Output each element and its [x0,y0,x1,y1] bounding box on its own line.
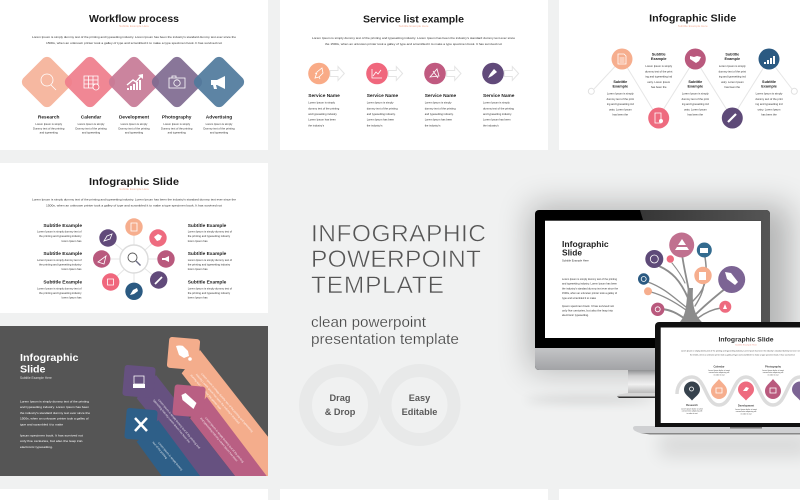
monitor body text: the industry's standard dummy text ever since the [562,286,618,290]
ribbon: peach: dummy text ever since the printer took [190,373,223,411]
main title: POWERPOINT [311,246,481,273]
label: advertising: and typesetting [210,131,229,135]
node right [157,250,175,268]
label: photography: and typesetting [168,131,186,135]
text: lower block 1 [607,80,634,117]
badge: drag and drop [306,370,374,440]
text: top block 2: Example [724,57,740,61]
panel: zigzag infographic [559,0,800,150]
heading: workflow process: Workflow process [89,13,179,25]
laptop intro text: the 1500s, when an unknown printer took a galley of type and scrambled it to make a type specimen book. It has survived not [690,354,795,356]
text: top block 2: dummy text of the print [719,69,746,73]
ribbon: peach: Lorem Ipsum is simply dummy text of the printing and typesetting [200,372,254,433]
label: research: Dummy text of the printing [33,126,65,130]
left text 1: Subtitle Example [43,223,82,229]
heading: infographic slide: Slide [20,364,46,376]
service 3: and typesetting industry. [425,112,454,116]
left text 1: the printing and typesetting industry [39,234,82,238]
label: research: and typesetting [40,131,58,135]
laptop heading: Infographic Slide [718,336,774,344]
monitor body text: 1500s, when an unknown printer took a galley of [562,291,617,295]
pin: photography [765,379,781,399]
body text: only five centuries, but also the leap into [20,439,83,443]
service 2: Lorem Ipsum has been [367,118,395,122]
card: tag [172,384,206,418]
monitor floor shadow [525,397,655,403]
label: advertising: Advertising [206,114,232,120]
label: research: Research [38,114,60,120]
body text: 1500s, when an unknown printer took a galley of [20,416,89,420]
intro text: Lorem Ipsum is simply dummy text of the printing and typesetting industry. Lorem Ipsum has been the industry's standard dummy text ever since the [32,198,237,202]
intro text [312,36,516,46]
right text 1: Lorem Ipsum is simply dummy text of [188,230,232,234]
badge: easy editable [385,370,454,440]
heading: infographic slide [20,353,79,376]
service 4: dummy text of the printing [483,106,514,110]
laptop intro text: Lorem Ipsum is simply dummy text of the printing and typesetting industry. Lorem Ipsum has been the industry's standard dummy text ever since [681,350,800,352]
label: photography: consectetur adipiscing elit [763,371,784,374]
right text 2: lorem Ipsum has [188,267,208,271]
left text 3: Subtitle Example [43,280,82,286]
ribbon: mauve: and typesetting industry Lorem Ipsum has been [199,416,239,463]
badge: easy editable: Easy [409,393,431,403]
subheading [311,314,459,348]
service 3: Lorem Ipsum has been [425,118,453,122]
right text 1: Subtitle Example [188,223,227,229]
label: photography: Lorem Ipsum dolor sit amet [762,369,784,372]
node lower right [150,271,167,289]
label: research: Research [686,403,698,407]
label: development: Development [119,114,149,120]
left text 2: the printing and typesetting industry [39,262,82,266]
monitor subtitle: Subtitle Example Here [562,258,589,262]
end node right [791,88,797,94]
text: top block 2: ing and typesetting ind [719,75,746,79]
tree chart [638,232,745,323]
card: rocket [167,337,200,370]
service 4: Lorem Ipsum has been [483,118,511,122]
monitor body text: only five centuries, but also the leap into [562,308,614,312]
node upper left [99,229,117,247]
service 3 [424,63,461,128]
pin: calendar [711,379,727,399]
ribbon: peach: industry Lorem Ipsum has been the industry's standard [195,373,241,425]
wave line [677,377,800,405]
label: calendar [75,114,107,135]
subtitle: Subtitle Example Here [399,24,429,28]
label: advertising: Dummy text of the printing [203,126,235,130]
pin: development [738,382,754,400]
body text: electronic typesetting. [20,445,53,449]
label: development: Lorem Ipsum dolor sit amet [735,408,757,411]
body text: and typesetting industry. Lorem Ipsum has been [20,405,90,409]
node: pencil [722,108,743,128]
ribbon: purple [137,375,235,476]
badge: drag and drop: Drag [330,393,350,403]
label: photography: Photography [162,114,192,120]
label: research [33,114,65,135]
card: inbox [122,365,156,398]
label: calendar: consectetur adipiscing elit [709,371,730,374]
ribbon: mauve [190,397,267,476]
service 3: Service Name [425,93,457,99]
left text 1 [37,223,82,243]
right text 3: Lorem Ipsum is simply dummy text of [188,286,232,290]
main title: INFOGRAPHIC [311,221,486,248]
label: research: Lorem Ipsum is simply [35,122,63,126]
label: photography [762,364,784,376]
monitor stand [617,370,660,398]
diamond: calendar [62,54,118,110]
label: development: in order to eat [740,412,752,415]
circle pyramid large [669,232,694,258]
left text 1: lorem Ipsum has [62,239,82,243]
right text 1: lorem Ipsum has [188,239,208,243]
body text: the industry's standard dummy text ever since the [20,411,91,415]
label: advertising [203,114,235,135]
circle pink [719,301,731,313]
service 3: the industry's [425,124,441,128]
heading: infographic slide: Infographic Slide [649,12,736,24]
node: chart [758,48,780,70]
service 1: Lorem Ipsum is simply [308,100,336,104]
text: lower block 2: ustry. Lorem Ipsum [684,107,707,111]
service 2 [366,63,403,128]
node: checklist [648,108,669,128]
panel: workflow process [0,0,268,150]
right text 2: Lorem Ipsum is simply dummy text of [188,258,232,262]
body text [20,399,91,449]
label: photography: Photography [765,364,782,368]
diamond: development [106,54,162,110]
ribbon: blue: text of the printing [152,441,169,460]
left text 3: Lorem Ipsum is simply dummy text of [37,286,82,290]
circle rocket [718,266,745,293]
circle pink small [667,255,674,263]
service 4: Lorem Ipsum is simply [483,100,510,104]
label: research: in order to eat [686,412,698,415]
circle peach note [694,267,712,284]
text: top block 2: Subtitle [725,52,739,56]
subtitle: Subtitle Example Here [119,24,149,28]
service 1: dummy text of the printing [308,106,340,110]
main title: TEMPLATE [311,272,444,299]
service 1 [308,63,344,128]
body text: Ipsum specimen book. It has survived not [20,434,83,438]
pin: advertising [792,382,800,400]
intro text: Lorem Ipsum is simply dummy text of the printing and typesetting industry. Lorem Ipsum has been the industry's standard dummy text ever since the [32,35,237,39]
service 3: Lorem Ipsum is simply [425,100,452,104]
label: calendar: Lorem Ipsum is simply [78,122,105,126]
label: photography: Lorem Ipsum is simply [163,122,191,126]
label: calendar: Dummy text of the printing [75,126,107,130]
label: development: consectetur adipiscing elit [736,410,757,413]
label: advertising: Lorem Ipsum is simply [206,122,233,126]
label: research [681,403,703,415]
monitor body text: and typesetting industry. Lorem Ipsum has been [562,282,617,286]
right text 2 [188,251,232,271]
heading: infographic slide: Infographic [20,353,79,364]
monitor body text: Ipsum specimen book. It has survived not [562,304,614,308]
body text: type and scrambled it to make [20,422,64,426]
circle blue [697,242,712,258]
intro text: 1500s, when an unknown printer took a galley of type and scrambled it to make a type specimen book. It has survived not [46,41,222,45]
panel: bottom middle slide edge [280,489,548,500]
radial spokes [102,227,166,291]
text: top block 1: ing and typesetting ind [645,75,673,79]
center ring: search [120,245,148,273]
text: lower block 2: Example [687,84,703,88]
text: top block 1: Lorem Ipsum is simply [645,64,673,68]
node: handshake [685,48,706,70]
label: calendar: Calendar [713,364,725,368]
laptop intro text [681,350,800,356]
right text 3: lorem Ipsum has [188,296,208,300]
text: lower block 2: has been the [688,113,704,117]
text: top block 2: ustry. Lorem Ipsum [721,80,744,84]
label: calendar: and typesetting [82,131,101,135]
left text 2: lorem Ipsum has [62,267,82,271]
label: development: Dummy text of the printing [118,126,150,130]
label: research: consectetur adipiscing elit [682,410,703,413]
label: photography [161,114,193,135]
body text: Lorem Ipsum is simply dummy text of the printing [20,399,90,403]
heading: infographic slide: Infographic Slide [89,176,179,188]
monitor heading: Slide [562,248,583,258]
text: top block 2 [719,52,746,89]
monitor body text: Lorem Ipsum is simply dummy text of the printing [562,277,617,281]
text: lower block 2 [682,80,709,117]
circle camera [651,303,664,316]
heading: service list example: Service list example [363,14,464,26]
service 2: dummy text of the printing [367,106,398,110]
right text 2: the printing and typesetting industry [188,262,231,266]
intro text [32,198,237,208]
subtitle: Subtitle Example Here [20,376,52,380]
label: calendar: Calendar [81,114,101,120]
node: document [612,48,632,70]
label: development [118,114,150,135]
diamond: photography [149,54,205,110]
label: calendar: Lorem Ipsum dolor sit amet [708,369,730,372]
panel: bottom right slide edge [559,489,800,500]
laptop screen [661,328,800,423]
diamond: research [19,54,75,110]
text: lower block 1: has been the [613,113,629,117]
panel: service list [280,0,548,150]
monitor body [535,210,770,370]
right text 2: Subtitle Example [188,251,227,257]
left text 3 [37,280,82,300]
service 1: Lorem Ipsum has been [308,118,336,122]
left text 2: Lorem Ipsum is simply dummy text of [37,258,82,262]
intro text: Lorem Ipsum is simply dummy text of the printing and typesetting industry. Lorem Ipsum has been the industry's standard dummy text ever since [312,36,516,40]
service 1: Service Name [308,93,340,99]
subheading: clean powerpoint [311,314,427,331]
laptop lid [655,322,800,427]
left text 2 [37,251,82,271]
monitor body text: electronic typesetting. [562,313,589,317]
text: lower block 3: has been the [761,113,777,117]
service 2: the industry's [367,124,383,128]
end node left [588,88,594,94]
circle chat [638,273,649,285]
service 4: and typesetting industry. [483,112,512,116]
card: tools [124,408,158,441]
panel: dark ribbon slide [0,326,268,476]
ribbon: mauve: Lorem Ipsum is simply dummy text of the printing [204,416,245,464]
label: photography: in order to eat [767,373,779,376]
monitor heading [562,240,609,258]
text: lower block 1: Lorem Ipsum is simply [607,92,634,96]
pin: research [684,382,700,400]
text: lower block 1: ing and typesetting ind [607,102,634,106]
service 1: and typesetting industry. [308,112,337,116]
label: calendar: in order to eat [713,373,725,376]
monitor body text [562,277,618,317]
service 4: the industry's [483,124,499,128]
text: lower block 2: dummy text of the print [682,97,709,101]
ribbon: blue: Lorem Ipsum is simply dummy [157,441,184,472]
subtitle: Subtitle Example Here [119,187,149,191]
right text 1: the printing and typesetting industry [188,234,231,238]
label: development [735,404,757,415]
text: lower block 1: Subtitle [613,80,627,84]
text: lower block 3 [755,80,783,117]
service 2: and typesetting industry. [367,112,396,116]
text: lower block 3: ustry. Lorem Ipsum [758,107,781,111]
text: top block 1: ustry. Lorem Ipsum [647,80,671,84]
text: lower block 2: Subtitle [688,80,702,84]
ribbon: peach [182,350,268,476]
left text 2: Subtitle Example [43,251,82,257]
node upper right [149,229,167,247]
text: lower block 3: Example [761,84,777,88]
label: research: Lorem Ipsum dolor sit amet [681,408,703,410]
text: lower block 3: dummy text of the print [755,97,783,101]
panel: bottom left slide edge [0,489,268,500]
right text 3 [188,280,232,300]
monitor heading: Infographic [562,240,609,249]
left text 3: lorem Ipsum has [62,296,82,300]
text: top block 1: Example [651,57,667,61]
circle phone [645,250,663,268]
text: lower block 1: dummy text of the print [607,97,634,101]
monitor shadow [530,205,790,370]
text: lower block 2: Lorem Ipsum is simply [682,92,709,96]
intro text: 1500s, when an unknown printer took a galley of type and scrambled it to make a type specimen book. It has survived not [46,204,222,208]
ribbon: purple: typesetting industry Lorem Ipsum has been the [152,398,192,444]
left text 1: Lorem Ipsum is simply dummy text of [37,230,82,234]
circle peach tiny [644,287,652,295]
tree trunk and branches [648,254,726,321]
subtitle: Subtitle Example Here [678,24,708,28]
text: top block 1: dummy text of the print [645,69,673,73]
laptop base [633,426,800,434]
text: lower block 3: Subtitle [762,80,776,84]
right text 3: Subtitle Example [188,280,227,286]
text: top block 2: Lorem Ipsum is simply [719,64,746,68]
node lower left [102,273,119,291]
left text 3: the printing and typesetting industry [39,291,82,295]
service 1: the industry's [308,124,325,128]
node left [93,250,110,268]
zigzag line [594,59,792,118]
node top [125,218,143,236]
intro text: the 1500s, when an unknown printer took a galley of type and scrambled it to make a type specimen book. It has survived not [325,42,502,46]
right text 1 [188,223,232,243]
text: lower block 3: ing and typesetting ind [756,102,783,106]
label: photography: Dummy text of the printing [161,126,193,130]
service 2: Lorem Ipsum is simply [367,100,394,104]
text: top block 2: has been the [725,85,741,89]
badge: drag and drop: & Drop [325,407,356,417]
ribbon: blue [137,420,200,476]
text: top block 1: Subtitle [652,52,666,56]
label: development: Lorem Ipsum is simply [121,122,148,126]
text: lower block 3: Lorem Ipsum is simply [756,92,783,96]
laptop shadow [660,434,800,456]
panel: radial infographic [0,163,268,313]
text: lower block 1: Example [612,84,628,88]
service 4: Service Name [483,93,515,99]
main title [311,221,486,299]
text: top block 1: has been the [651,85,667,89]
right text 3: the printing and typesetting industry [188,291,231,295]
laptop subtitle: Subtitle Example Here [735,344,758,346]
label: development: Development [738,404,754,408]
ribbon: purple: Lorem Ipsum is simply dummy text of the printing and [157,398,202,450]
node bottom [125,283,143,300]
label: development: and typesetting [125,131,144,135]
badge: easy editable: Editable [402,407,437,417]
monitor body text: type and scrambled it to make [562,296,596,300]
monitor mockup [525,205,790,403]
diamond: advertising [191,54,247,110]
text: lower block 1: ustry. Lorem Ipsum [609,107,632,111]
text: top block 1 [645,52,673,89]
intro text [32,35,237,45]
label: calendar [708,364,730,376]
service 2: Service Name [367,93,399,99]
service 4 [482,63,519,128]
text: lower block 2: ing and typesetting ind [682,102,709,106]
subheading: presentation template [311,331,459,348]
laptop mockup [633,322,800,456]
service 3: dummy text of the printing [425,106,456,110]
